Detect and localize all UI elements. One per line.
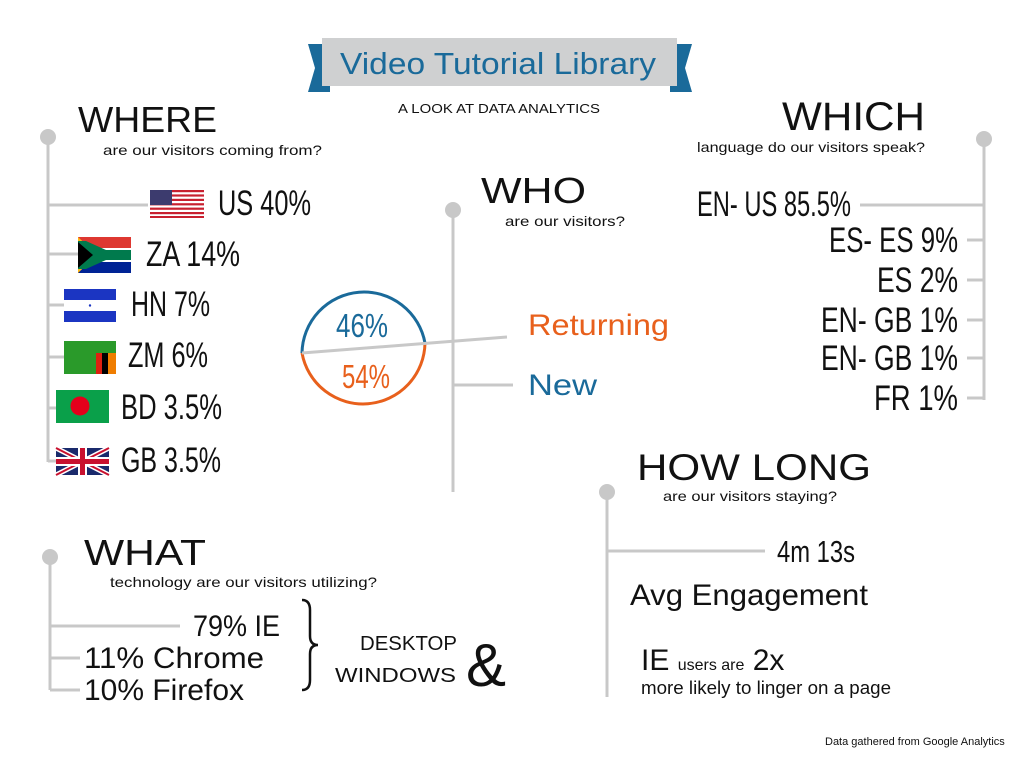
desktop windows: DESKTOP (360, 633, 457, 655)
returning label: Returning (528, 309, 669, 342)
panel: where (40, 99, 322, 480)
title banner (308, 38, 692, 92)
heading: where: WHERE (78, 99, 217, 140)
duration value: 4m 13s (777, 534, 855, 569)
new label: New (528, 369, 597, 402)
language list: ES- ES 9% (829, 221, 958, 260)
GB label: GB 3.5% (121, 441, 221, 480)
language list: EN- GB 1% (821, 339, 958, 378)
ampersand: & (466, 632, 506, 699)
panel: what (42, 532, 506, 707)
heading: what: WHAT (84, 532, 206, 573)
browser list: 11% Chrome (84, 642, 264, 675)
heading: how long: HOW LONG (637, 447, 871, 488)
where subtitle: are our visitors coming from? (103, 142, 322, 158)
pie circle chart: 46% (336, 307, 388, 344)
how long subtitle: are our visitors staying? (663, 488, 837, 504)
panel: which (697, 95, 992, 418)
HN label: HN 7% (131, 285, 210, 324)
pie circle chart (302, 292, 507, 404)
US label: US 40% (218, 184, 311, 223)
icon: US flag (150, 190, 204, 218)
panel: who (302, 170, 669, 492)
what subtitle: technology are our visitors utilizing? (110, 574, 377, 590)
brace (302, 600, 318, 690)
ZA label: ZA 14% (146, 235, 240, 274)
browser list (84, 610, 280, 707)
browser list: 10% Firefox (84, 674, 244, 707)
panel: how long: more likely to linger on a page (641, 678, 891, 698)
icon: BD flag (56, 390, 109, 423)
language list: EN- GB 1% (821, 301, 958, 340)
heading: which: WHICH (782, 95, 925, 139)
icon: GB flag (56, 448, 109, 475)
desktop windows (335, 633, 457, 687)
subtitle: A LOOK AT DATA ANALYTICS (398, 101, 600, 116)
language list: FR 1% (874, 379, 958, 418)
who subtitle: are our visitors? (505, 213, 625, 229)
BD label: BD 3.5% (121, 388, 222, 427)
avg engagement: Avg Engagement (630, 579, 869, 612)
icon: ZM flag (64, 341, 116, 374)
language list: EN- US 85.5% (697, 185, 851, 224)
heading: who: WHO (481, 170, 586, 211)
language list (697, 185, 958, 418)
which subtitle: language do our visitors speak? (697, 139, 925, 155)
IE note: IE users are 2x (641, 644, 784, 677)
icon: ZA flag (78, 237, 131, 273)
language list: ES 2% (877, 261, 958, 300)
browser list: 79% IE (193, 610, 280, 643)
pie circle chart: 54% (342, 358, 390, 395)
title banner: Video Tutorial Library (340, 46, 657, 81)
panel: how long (599, 447, 891, 698)
ZM label: ZM 6% (128, 336, 208, 375)
footer: Data gathered from Google Analytics (825, 736, 1005, 748)
icon: HN flag (64, 289, 116, 322)
desktop windows: WINDOWS (335, 665, 456, 687)
